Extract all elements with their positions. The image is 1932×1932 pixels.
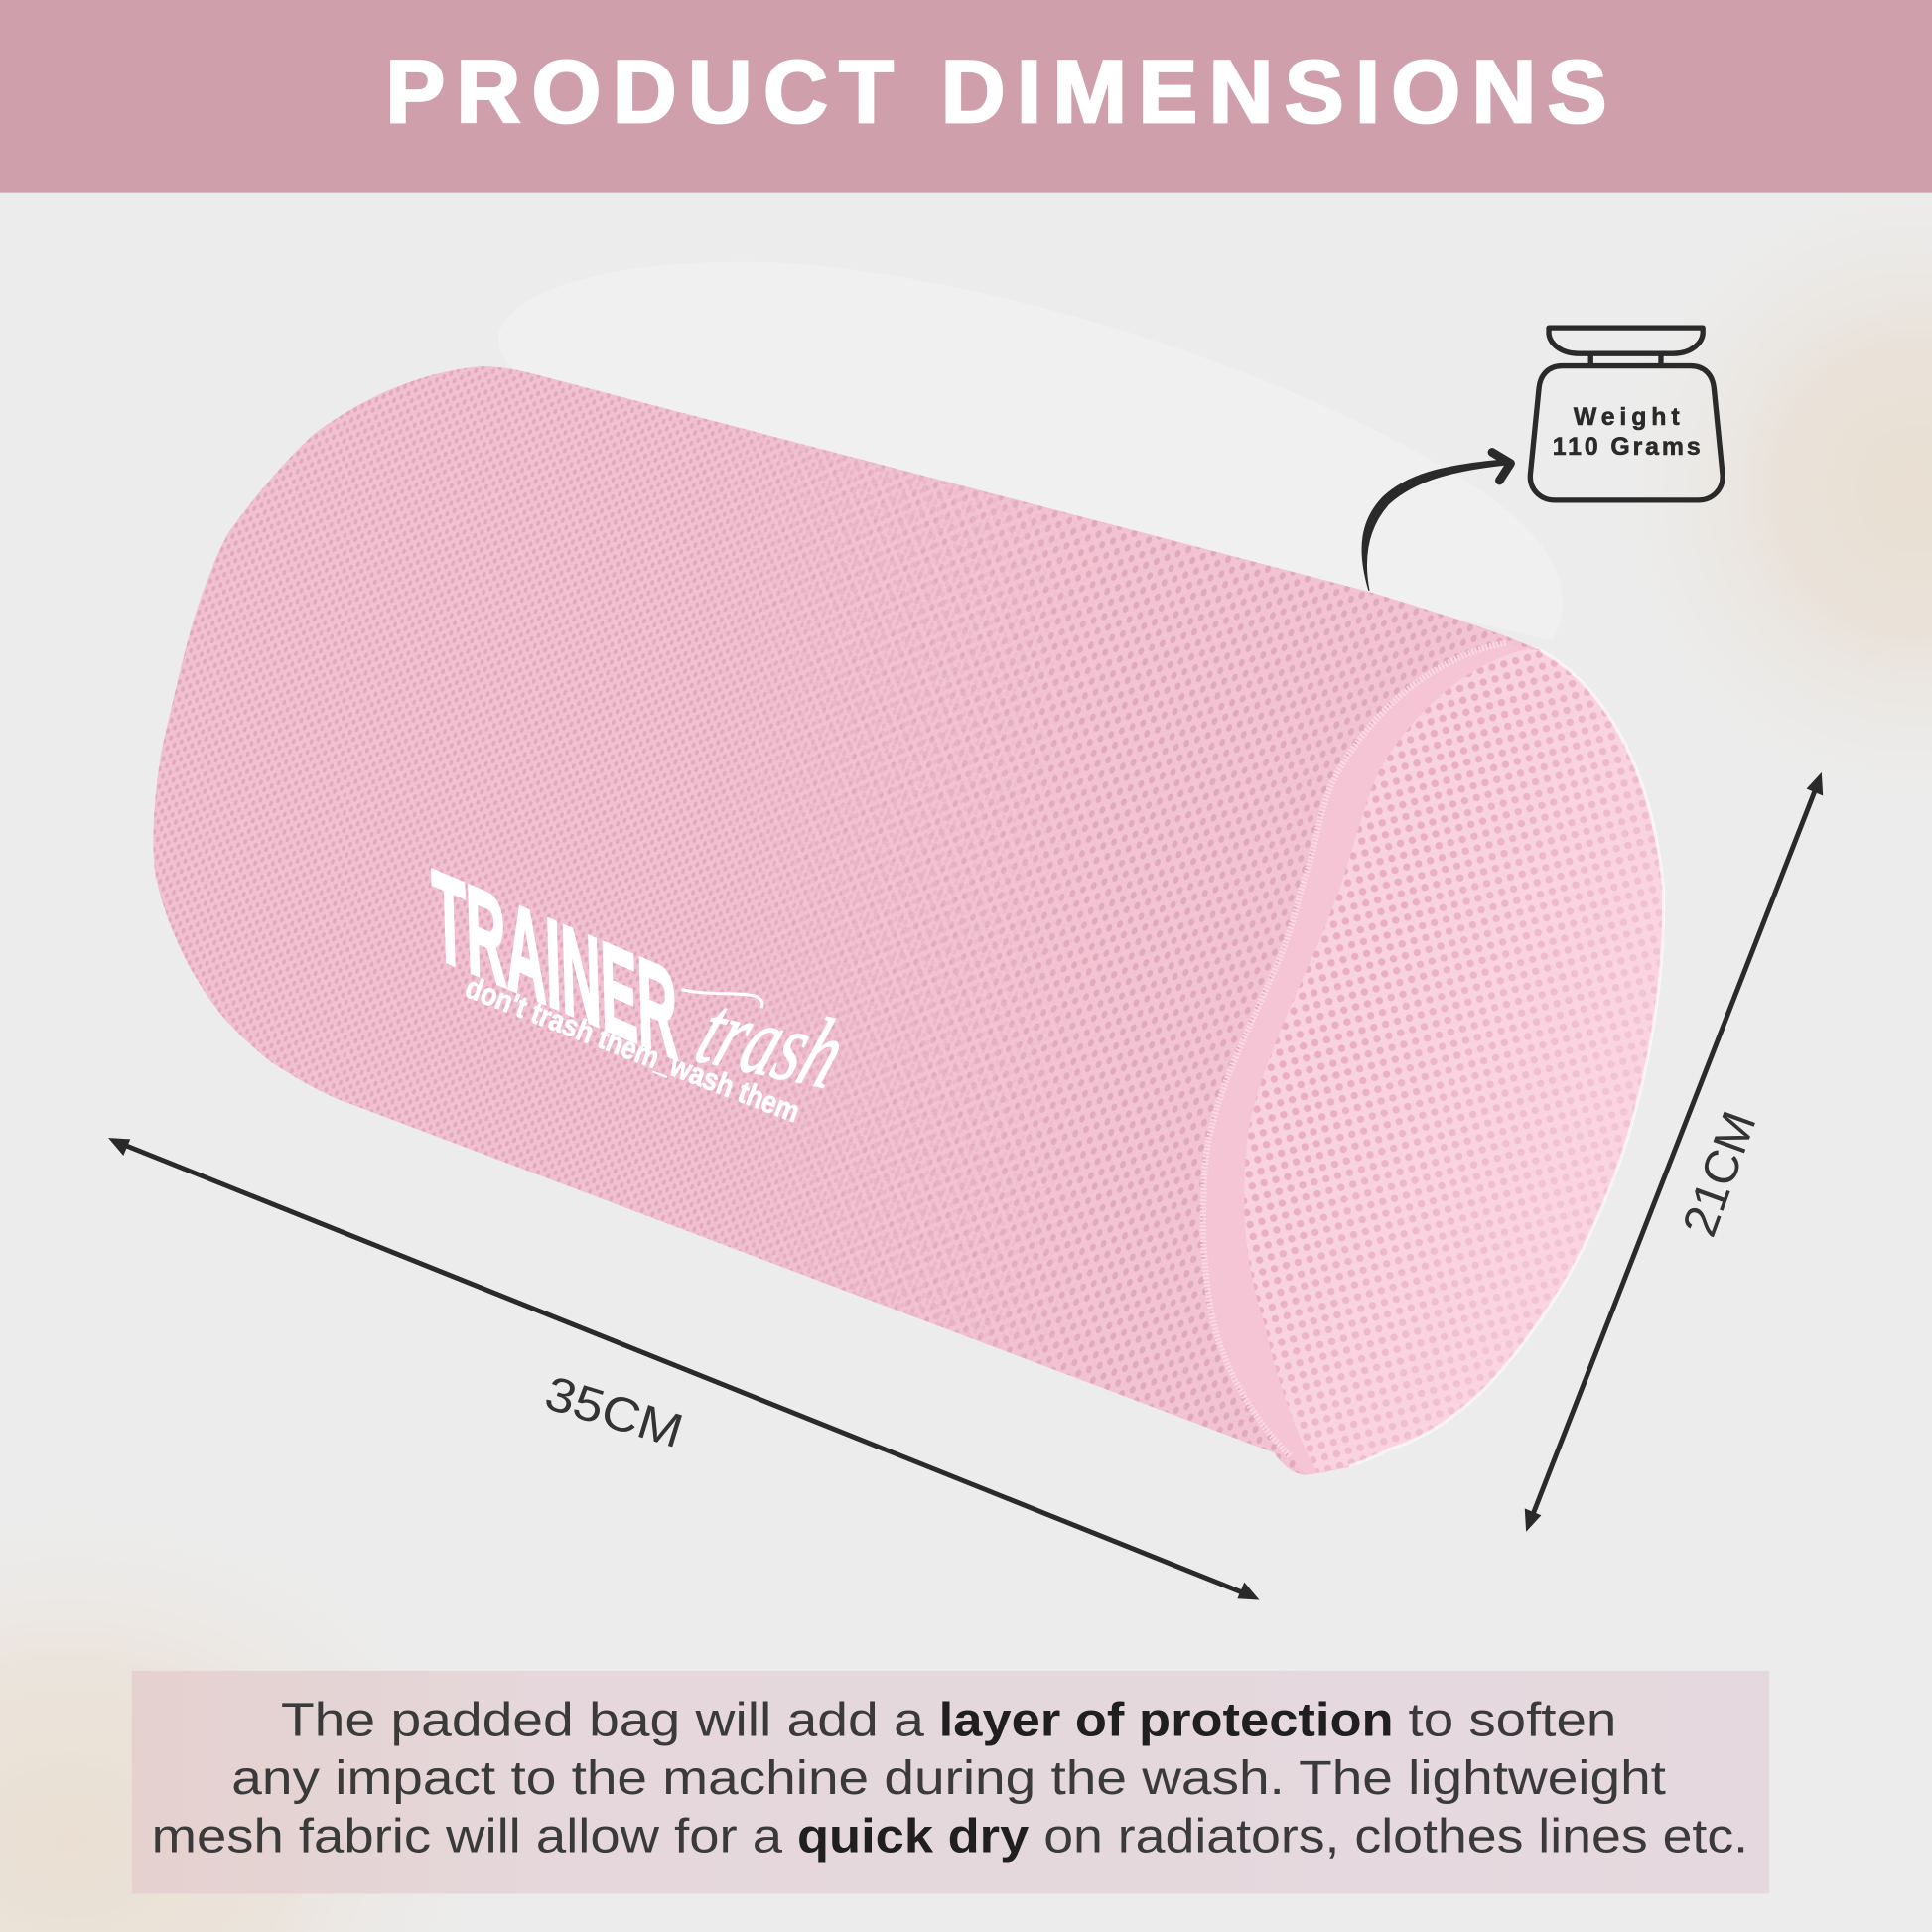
logo: TRAINER <box>430 842 679 1087</box>
weight label: Weight <box>1574 404 1680 431</box>
icon: weighing scale with weight label <box>1530 328 1723 500</box>
product: pink mesh bag <box>153 366 1664 1475</box>
description text: mesh fabric will allow for a <box>152 1809 782 1863</box>
header banner <box>0 0 1932 193</box>
bag body <box>153 366 1664 1475</box>
arrow: bag to weight <box>1362 452 1511 590</box>
description text: The padded bag will add a <box>281 1694 924 1747</box>
logo wordmark: trash: trash <box>683 976 860 1110</box>
description panel <box>132 1671 1769 1894</box>
description text: to soften <box>1409 1694 1616 1747</box>
zipper <box>1203 643 1601 1475</box>
description text: any impact to the machine during the wash. The lightweight <box>231 1751 1667 1805</box>
weight label <box>1553 404 1701 461</box>
logo <box>430 842 860 1129</box>
description text: on radiators, clothes lines etc. <box>1043 1809 1748 1863</box>
label: 35CM: 35CM <box>539 1366 689 1458</box>
bag end cap <box>1244 649 1664 1472</box>
arrow: 21cm diameter <box>1525 773 1823 1530</box>
logo flourish <box>681 990 762 1008</box>
weight label: 110 Grams <box>1553 434 1701 461</box>
description text: quick dry <box>797 1809 1029 1863</box>
title: PRODUCT DIMENSIONS <box>385 42 1606 141</box>
arrow: 35cm length <box>109 1139 1258 1599</box>
logo tagline: don't trash them_wash them <box>461 970 804 1129</box>
description text <box>152 1694 1748 1863</box>
description text: layer of protection <box>939 1694 1394 1747</box>
label: 21CM: 21CM <box>1673 1105 1767 1243</box>
